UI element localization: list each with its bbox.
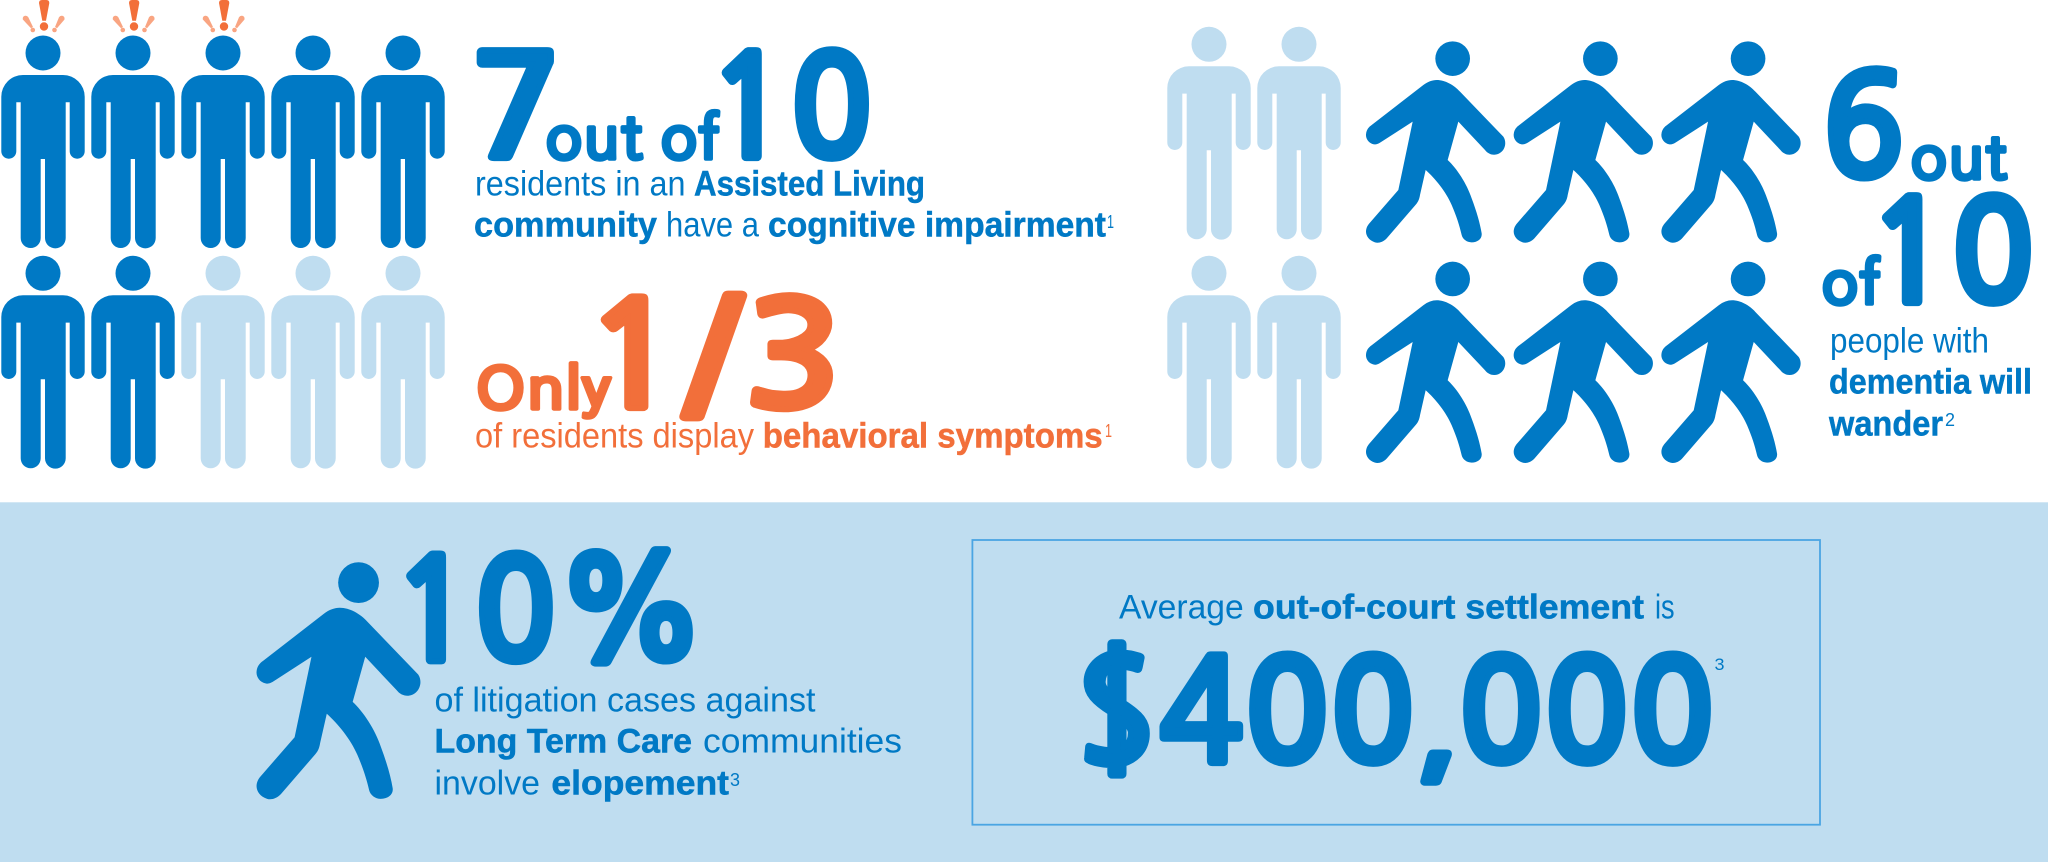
heading: Only 1/3: Only [475, 360, 612, 418]
description: average out-of-court settlement: Average [1119, 588, 1244, 626]
description: dementia will wander: wander [1828, 405, 1943, 444]
description: residents in Assisted Living: residents in an [475, 165, 686, 204]
heading: 6 out of 10: out [1910, 130, 2007, 188]
heading: Only 1/3 [475, 284, 843, 430]
description: behavioral symptoms: 1 [1105, 421, 1112, 441]
description: residents in Assisted Living: 1 [1107, 212, 1114, 232]
description: litigation cases: Long Term Care [434, 723, 692, 761]
heading: 7 out of 10: out of [545, 110, 720, 168]
text block: only 1/3 [475, 284, 1112, 455]
heading: 6 out of 10: 6 [1822, 59, 1905, 199]
footnote marker: 3 [1714, 655, 1724, 674]
icon grid: ten people with dementia, six wandering [1167, 27, 1801, 469]
box outline [972, 540, 1820, 825]
description: residents in Assisted Living [474, 165, 1114, 245]
description: dementia will wander: dementia will [1829, 362, 2032, 401]
text block: 6 out of 10 [1821, 59, 2035, 444]
description: litigation cases: communities [703, 723, 902, 761]
description: residents in Assisted Living: have a [666, 206, 759, 245]
description: residents in Assisted Living: community [474, 206, 658, 245]
description: litigation cases: elopement [551, 764, 729, 802]
description: litigation cases: 3 [730, 770, 740, 790]
heading: 7 out of 10: 10 [707, 40, 873, 180]
text block: 7 out of 10 [470, 40, 1114, 245]
icons: orange exclamation alerts [23, 0, 245, 32]
description: average out-of-court settlement [1119, 588, 1675, 626]
description: average out-of-court settlement: is [1655, 588, 1675, 626]
heading: 7 out of 10 [470, 40, 873, 180]
heading: Only 1/3: 1/3 [583, 284, 843, 430]
description: litigation cases: of litigation cases against [434, 682, 816, 720]
description: residents in Assisted Living: cognitive impairment [768, 206, 1106, 245]
heading: 6 out of 10: 10 [1867, 185, 2035, 325]
heading: 10%: 10% [392, 543, 706, 683]
panel: settlement callout box [972, 540, 1820, 825]
panel: light blue lower band [0, 502, 2048, 862]
description: behavioral symptoms: behavioral symptoms [763, 416, 1103, 455]
icon: large walking person [257, 562, 420, 799]
icon row: residents row one [1, 36, 445, 248]
description: litigation cases [434, 682, 902, 802]
icon row: residents row two [1, 256, 445, 469]
description: litigation cases: involve [434, 764, 540, 802]
heading: 7 out of 10: 7 [470, 40, 562, 180]
icons: six walking people [1366, 41, 1801, 463]
figure: $400,000: $400,000 [1073, 643, 1715, 785]
description: dementia will wander: 2 [1945, 410, 1955, 430]
heading: 6 out of 10 [1821, 59, 2035, 325]
icons: four standing people [1167, 27, 1341, 469]
description: residents in Assisted Living: Assisted Living [694, 165, 925, 204]
description: behavioral symptoms: of residents display [475, 416, 754, 455]
heading: 6 out of 10: of [1821, 254, 1881, 314]
description: behavioral symptoms [475, 416, 1112, 455]
description: dementia will wander: people with [1830, 321, 1989, 360]
icon grid: ten residents, seven highlighted [1, 0, 445, 469]
text block: 10 percent of litigation [392, 543, 902, 802]
description: average out-of-court settlement: out-of-court settlement [1253, 588, 1644, 626]
description: dementia will wander [1828, 321, 2032, 444]
